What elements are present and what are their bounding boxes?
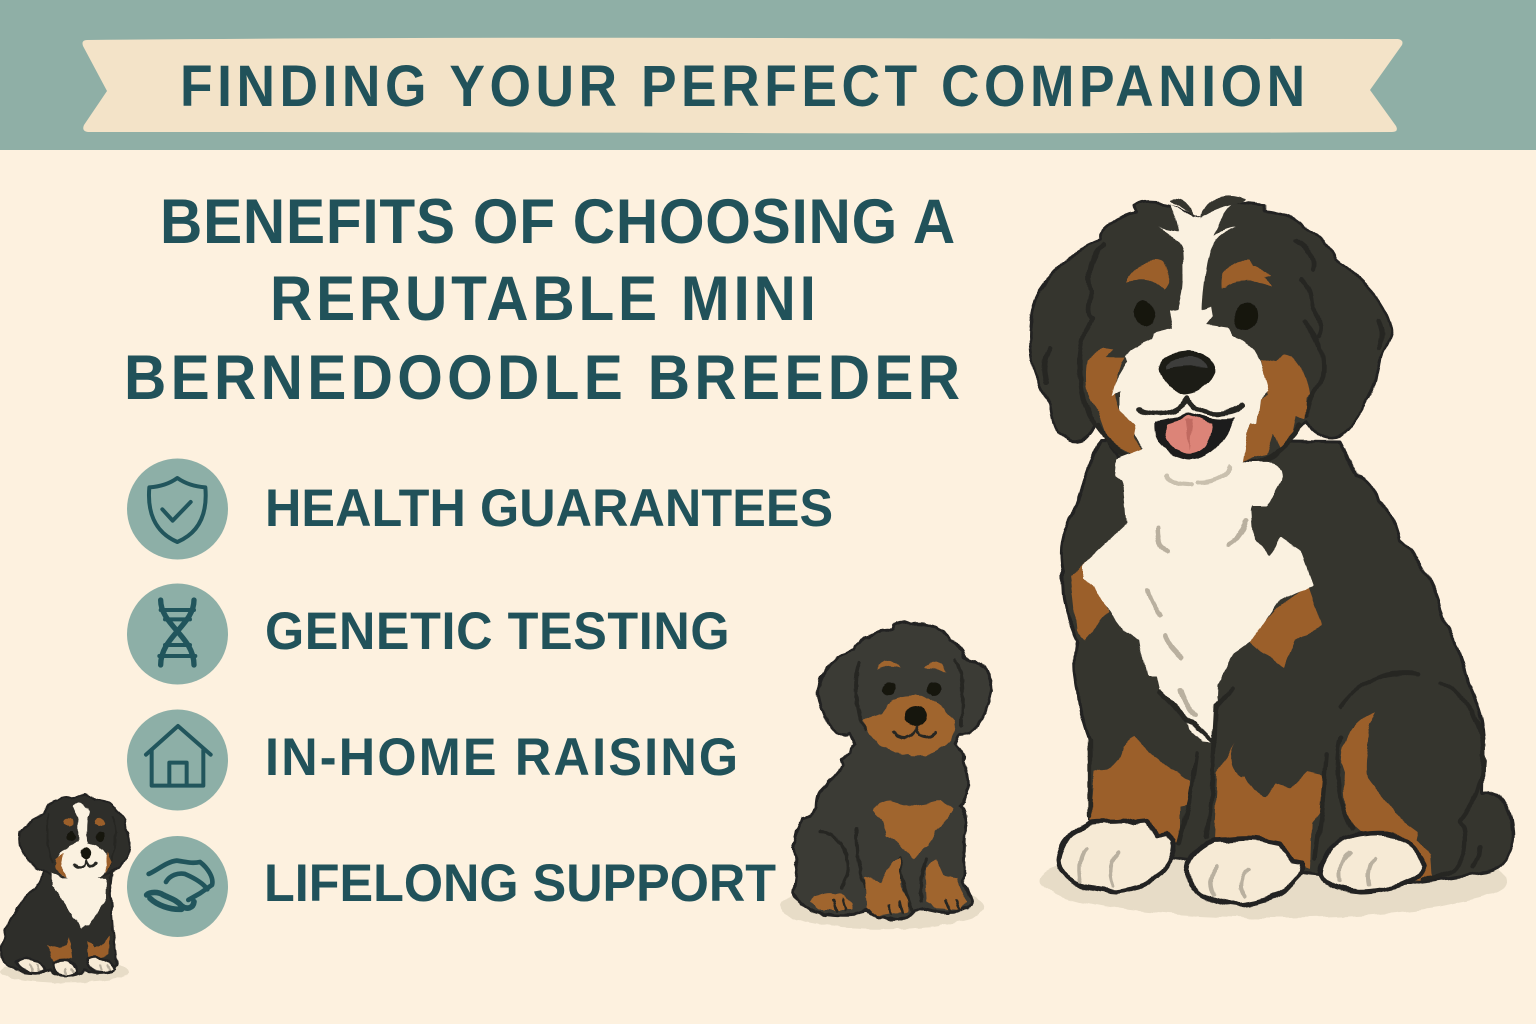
toes: [31, 965, 109, 974]
benefit: health guarantees: [127, 458, 833, 560]
puppy body and head: [793, 622, 992, 920]
white chest: [52, 872, 107, 928]
ear lines: [47, 815, 115, 865]
eyes: [1134, 300, 1155, 327]
title ribbon: [82, 38, 1402, 133]
fur lines: [821, 660, 963, 910]
label: IN-HOME RAISING: [265, 727, 738, 786]
icon: DNA helix: [159, 600, 195, 665]
dark rim under cheeks: [1098, 425, 1300, 468]
haunch fur: [1342, 712, 1433, 880]
shadow: [1040, 842, 1508, 918]
header band: [0, 0, 1536, 150]
eyebrows: [1126, 259, 1273, 289]
chest fur marks: [1148, 520, 1247, 716]
white chest: [1085, 470, 1312, 741]
icon: house: [146, 726, 211, 786]
ear lines: [1044, 240, 1381, 425]
benefit: lifelong support: [127, 836, 776, 937]
front-left paw: [1058, 819, 1174, 892]
front-left leg fur: [1090, 737, 1190, 843]
label: GENETIC TESTING: [265, 601, 730, 660]
brown brows: [64, 818, 73, 827]
label: HEALTH GUARANTEES: [265, 478, 833, 537]
smile: [75, 860, 96, 867]
top hair curls: [1168, 195, 1247, 219]
brown cheeks: [1085, 348, 1142, 458]
heading: RERUTABLE MINI: [270, 263, 816, 333]
nose: [905, 706, 927, 726]
benefit: genetic testing: [127, 584, 730, 684]
toes: [833, 900, 960, 915]
large adult bernedoodle: [1030, 195, 1513, 918]
nose: [1159, 351, 1214, 395]
head: [1030, 195, 1391, 505]
white blaze, muzzle and neck: [1112, 203, 1280, 505]
icon: handshake: [147, 861, 212, 909]
rear paw: [1320, 833, 1425, 892]
brows: [876, 661, 947, 673]
muzzle: [863, 696, 955, 756]
puppy body: [1, 870, 117, 976]
benefit: in-home raising: [127, 710, 738, 810]
chest patch: [873, 800, 953, 858]
body: [1061, 440, 1513, 885]
eyes: [67, 831, 75, 841]
paws: [17, 958, 115, 976]
icon: shield with check: [149, 478, 206, 542]
chest side brown patches: [1070, 550, 1108, 640]
heading: BENEFITS OF CHOOSING A: [160, 186, 955, 256]
head and ears: [1030, 202, 1391, 462]
open mouth: [1155, 412, 1233, 460]
heading: BERNEDOODLE BREEDER: [124, 342, 960, 412]
heading: [124, 186, 960, 412]
label: LIFELONG SUPPORT: [264, 853, 776, 912]
nose: [80, 848, 92, 859]
smile: [893, 727, 936, 738]
white face: [57, 803, 108, 882]
shadow: [0, 960, 130, 983]
medium brown and black puppy: [780, 622, 992, 929]
puppy head and ears: [19, 795, 130, 880]
title: FINDING YOUR PERFECT COMPANION: [180, 54, 1305, 118]
brown legs: [47, 937, 109, 963]
tongue: [1166, 414, 1213, 453]
smile line: [1141, 398, 1241, 414]
leg outlines: [1090, 672, 1483, 878]
brown cheeks: [55, 852, 112, 878]
brown paws: [810, 858, 967, 917]
front-right paw: [1187, 838, 1302, 905]
small bernedoodle puppy: [0, 795, 130, 983]
legs, paws and haunch: [1058, 672, 1483, 905]
eyes: [882, 682, 896, 696]
shadow: [780, 884, 985, 929]
chin shadow: [1168, 467, 1229, 484]
front-right leg fur: [1213, 742, 1323, 870]
